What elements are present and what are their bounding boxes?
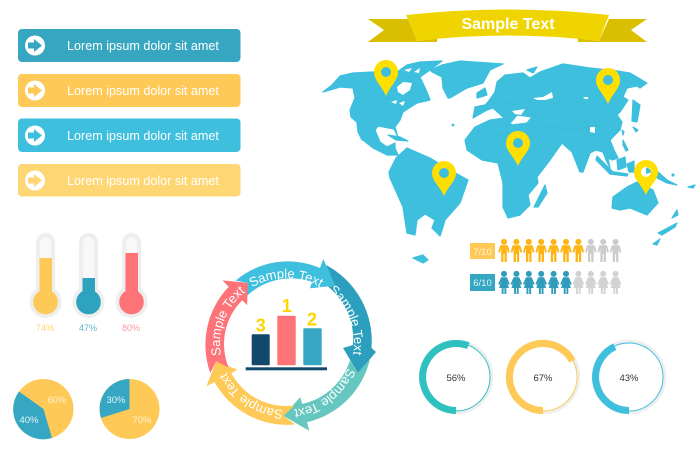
pin: Australia (634, 160, 658, 195)
pictogram row 7/10 (470, 239, 621, 262)
pin: North America (374, 60, 398, 96)
arrow: blue top: Sample Text (250, 268, 324, 288)
pie chart 30/70: 30% (106, 395, 126, 406)
button 1: Lorem ipsum dolor sit amet (67, 39, 219, 53)
world map (323, 61, 695, 263)
button 4: Lorem ipsum dolor sit amet (67, 174, 219, 188)
pin: Africa (506, 131, 530, 166)
arrow: yellow bottom left: Sample Text (220, 372, 282, 419)
donut 43%: 43% (619, 373, 639, 384)
donut 67%: 67% (533, 373, 553, 384)
pie chart 30/70: 70% (132, 415, 152, 426)
pie chart 60/40: 40% (19, 415, 39, 426)
arrow: dark blue right: Sample Text (333, 286, 363, 356)
donut 56%: 56% (446, 373, 466, 384)
podium bar chart: 1 (282, 296, 292, 316)
ribbon title: Sample Text (461, 16, 555, 33)
podium bar chart (246, 296, 327, 370)
button 2 (18, 74, 240, 107)
arrow: teal bottom right: Sample Text (294, 369, 355, 418)
arrow: dark blue right (326, 265, 376, 373)
thermometer 74%: 74% (36, 323, 54, 333)
donut 67% (508, 342, 578, 412)
arrow: blue top (236, 259, 335, 296)
thermometer 74% (30, 233, 62, 333)
pin: South America (432, 161, 456, 196)
button 4 (18, 164, 240, 196)
ribbon title (368, 10, 647, 42)
button 3: Lorem ipsum dolor sit amet (67, 129, 219, 143)
thermometer 47%: 47% (79, 323, 97, 333)
donut 56% (420, 342, 492, 412)
circular arrow diagram (205, 259, 376, 431)
pie chart 60/40 (13, 379, 73, 439)
pin: Russia (596, 68, 620, 104)
button 1 (18, 29, 240, 62)
donut 43% (594, 342, 664, 412)
pictogram row 6/10 (470, 271, 621, 294)
thermometer 80% (116, 233, 148, 333)
thermometer 47% (72, 233, 104, 333)
pie chart 30/70 (100, 379, 160, 439)
pictogram row 7/10: 7/10 (473, 247, 492, 258)
arrow: red left: Sample Text (211, 286, 246, 356)
podium bar chart: 3 (256, 316, 266, 336)
arrow: teal bottom right (284, 360, 370, 431)
button 3 (18, 118, 240, 152)
podium bar chart: 2 (307, 310, 317, 330)
pictogram row 6/10: 6/10 (473, 278, 492, 289)
pie chart 60/40: 60% (47, 395, 67, 406)
thermometer 80%: 80% (122, 323, 140, 333)
arrow: yellow bottom left (206, 362, 295, 425)
button 2: Lorem ipsum dolor sit amet (67, 84, 219, 98)
